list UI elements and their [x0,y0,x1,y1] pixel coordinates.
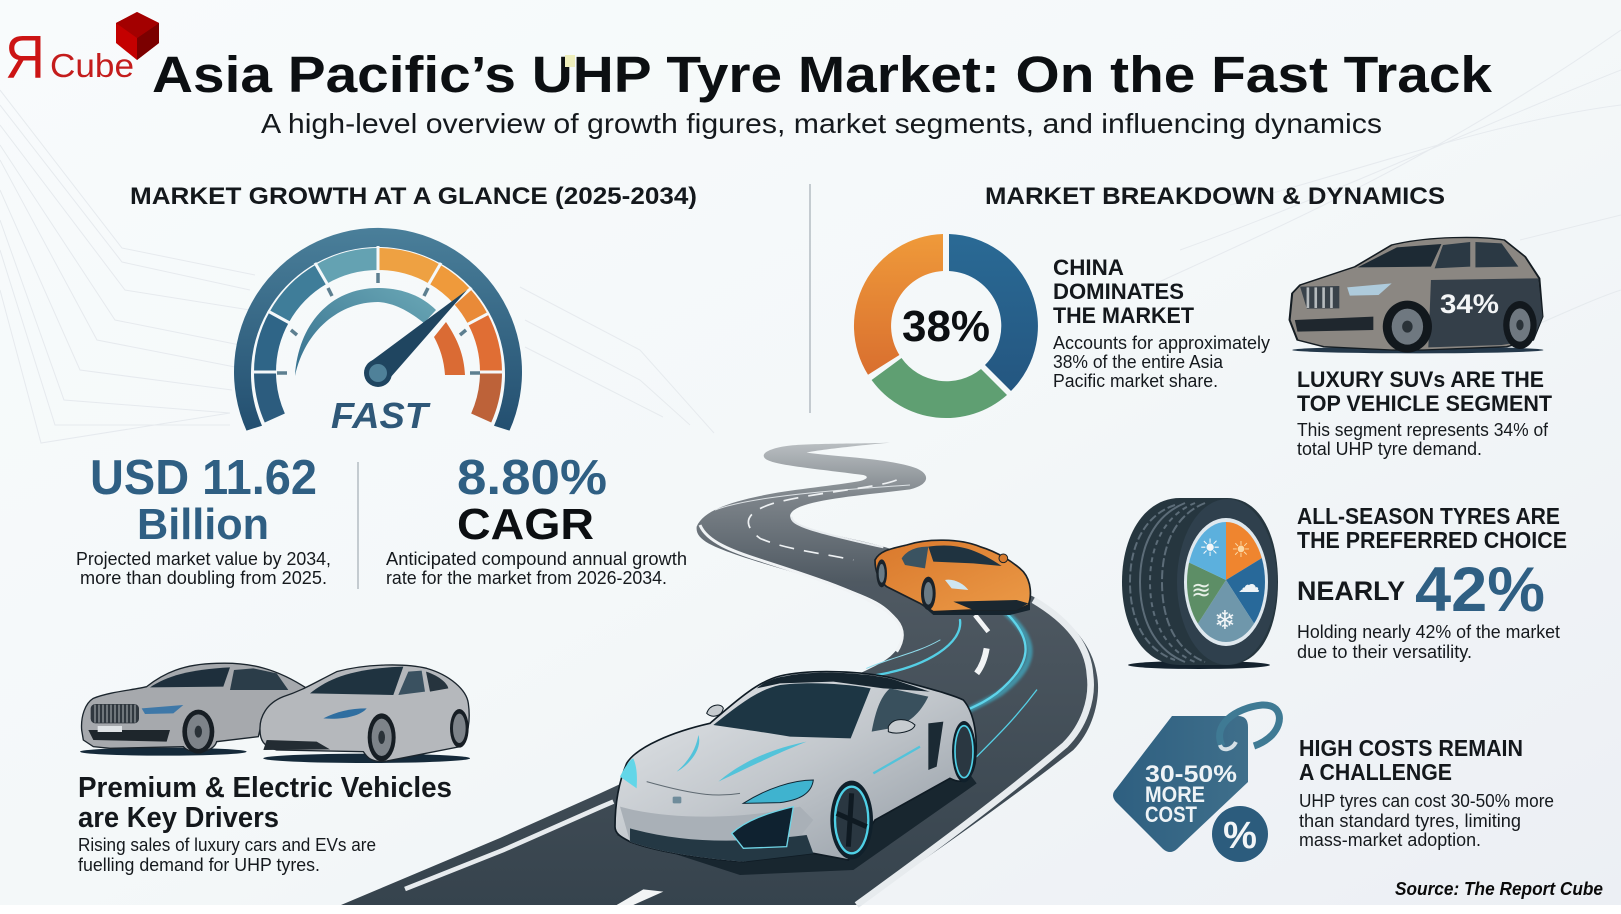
text: premium and electric vehicles: Rising sales of luxury cars and EVs are [78,835,376,855]
logo: RCube [5,12,159,91]
text: premium and electric vehicles [78,772,452,875]
text: premium and electric vehicles: Premium & Electric Vehicles [78,772,452,804]
text: all-season tyres [1297,503,1567,662]
speed trails [867,613,1037,757]
subtitle: A high-level overview of growth figures, market segments, and influencing dynamics [261,108,1382,139]
text: luxury SUVs: LUXURY SUVs ARE THE [1297,367,1544,392]
icon: premium and electric cars [80,663,470,763]
stat: market value: Billion [137,500,269,549]
icon: luxury SUV: 34% [1440,289,1499,319]
text: all-season tyres: Holding nearly 42% of the market [1297,622,1560,642]
stat: CAGR [386,451,687,588]
text: China dominates: CHINA [1053,255,1124,280]
text: high costs: HIGH COSTS REMAIN [1299,735,1523,761]
text: luxury SUVs: This segment represents 34% of [1297,420,1549,440]
stat: market value: USD 11.62 [90,451,317,505]
text: all-season tyres: THE PREFERRED CHOICE [1297,527,1567,553]
icon: silver sports car [615,672,977,875]
text: all-season tyres: ALL-SEASON TYRES ARE [1297,503,1560,529]
logo: RCube: Cube [50,47,134,84]
donut chart: China share [854,234,1038,418]
stat: CAGR: rate for the market from 2026-2034. [386,568,667,588]
text: China dominates: DOMINATES [1053,279,1184,304]
logo: RCube: Я [5,24,45,91]
text: premium and electric vehicles: fuelling demand for UHP tyres. [78,855,320,875]
text: China dominates [1053,255,1270,391]
text: all-season tyres: due to their versatility. [1297,642,1472,662]
text: China dominates: 38% of the entire Asia [1053,352,1224,372]
title: Asia Pacific’s UHP Tyre Market: On the Fast Track [152,46,1493,103]
stat: CAGR: 8.80% [457,451,607,505]
icon: all-season tyre: ≋ [1191,576,1211,604]
icon: all-season tyre: ☁ [1238,573,1260,598]
stat: CAGR: CAGR [457,500,594,549]
stat: market value: more than doubling from 2025. [80,568,327,588]
icon: price tag [1113,705,1279,862]
icon: all-season tyre: ☀ [1199,534,1221,562]
icon: orange sports car [875,540,1030,615]
text: premium and electric vehicles: are Key Drivers [78,802,279,834]
text: high costs [1299,735,1554,850]
text: high costs: A CHALLENGE [1299,759,1452,785]
text: luxury SUVs: total UHP tyre demand. [1297,439,1482,459]
stat: market value: Projected market value by 2034, [76,549,331,569]
road [341,443,1098,905]
icon: price tag: COST [1145,802,1197,827]
text: all-season tyres: 42% [1415,555,1545,625]
icon: all-season tyre [1122,498,1278,669]
text: China dominates: Accounts for approximately [1053,333,1270,353]
heading: market growth: MARKET GROWTH AT A GLANCE (2025-2034) [130,183,697,210]
source note: Source: The Report Cube [1395,879,1603,899]
speedometer gauge: FAST [331,395,431,436]
icon: price tag: % [1223,815,1257,857]
text: all-season tyres: NEARLY [1297,576,1405,606]
stat: CAGR: Anticipated compound annual growth [386,549,687,569]
donut chart: China share: 38% [902,302,990,351]
heading: market breakdown: MARKET BREAKDOWN & DYNAMICS [985,183,1445,210]
text: high costs: mass-market adoption. [1299,830,1481,850]
speedometer gauge [234,228,522,436]
text: high costs: than standard tyres, limiting [1299,811,1521,831]
text: China dominates: THE MARKET [1053,303,1195,328]
icon: price tag: 30-50% [1145,761,1237,788]
text: luxury SUVs: TOP VEHICLE SEGMENT [1297,391,1553,416]
text: luxury SUVs [1297,367,1553,459]
icon: price tag: MORE [1145,782,1205,807]
icon: all-season tyre: ☀ [1231,538,1251,563]
text: high costs: UHP tyres can cost 30-50% more [1299,791,1554,811]
stat: market value [76,451,331,588]
icon: luxury SUV [1290,237,1544,353]
text: China dominates: Pacific market share. [1053,371,1218,391]
icon: all-season tyre: ❄ [1214,606,1236,636]
